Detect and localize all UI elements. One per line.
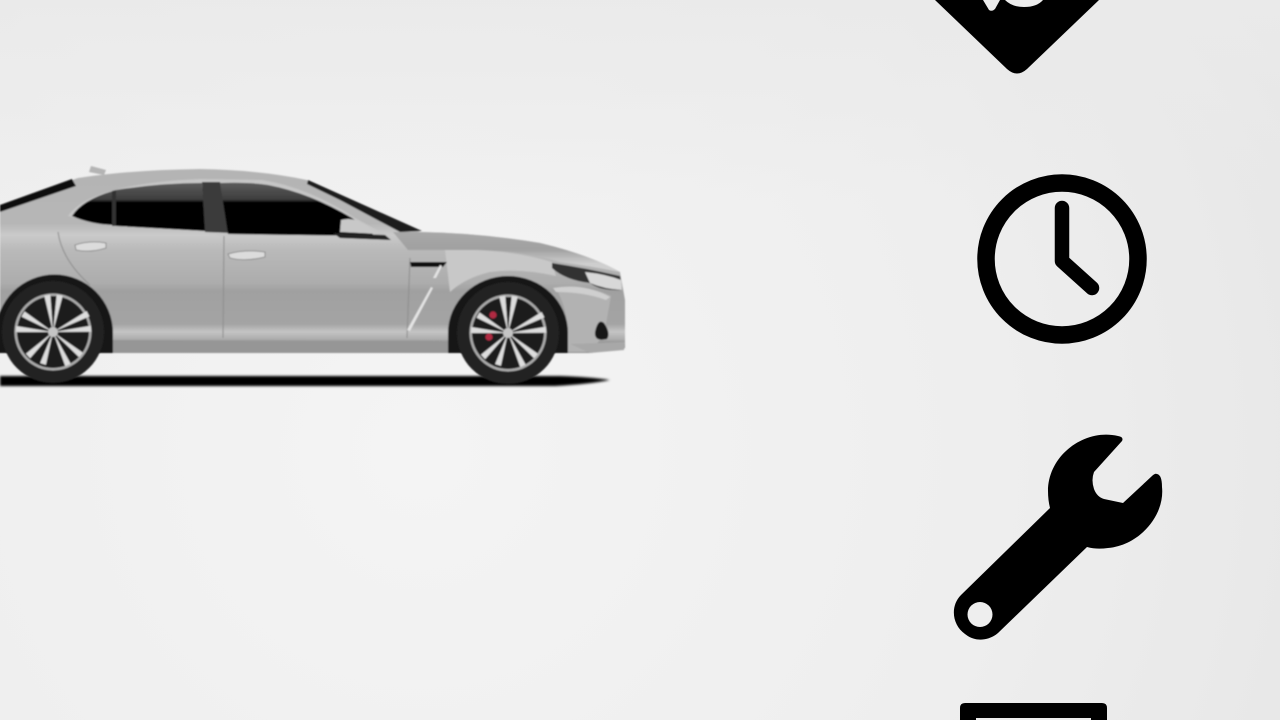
mirror xyxy=(340,219,379,234)
door handles xyxy=(75,242,106,251)
rear window strip xyxy=(0,179,76,212)
car body xyxy=(0,166,625,353)
wheel arches xyxy=(0,274,113,353)
lower sill xyxy=(100,340,560,353)
icon: document frame xyxy=(960,703,1107,720)
front bumper xyxy=(556,288,611,352)
rear door window xyxy=(116,183,206,231)
window trim xyxy=(68,179,392,238)
tag cut-out xyxy=(983,0,1043,11)
mirror shadow xyxy=(333,233,391,240)
icon: wrench xyxy=(954,435,1162,640)
rear quarter window xyxy=(72,191,113,225)
icon: price tag xyxy=(935,0,1099,74)
car xyxy=(0,166,625,386)
front fender highlight xyxy=(445,250,556,292)
brake caliper xyxy=(485,311,497,341)
front door window xyxy=(220,183,375,236)
rear spoiler fin xyxy=(89,166,106,175)
fender vent xyxy=(410,262,447,267)
windshield xyxy=(307,180,422,232)
b-pillar xyxy=(202,182,232,233)
headlight xyxy=(552,263,622,290)
rear wheel xyxy=(2,281,104,383)
hood panel xyxy=(393,232,620,272)
window divider xyxy=(112,190,116,226)
car ground shadow xyxy=(0,376,610,386)
icon: clock xyxy=(986,183,1138,335)
door seams xyxy=(58,232,410,338)
front wheel xyxy=(457,282,559,384)
